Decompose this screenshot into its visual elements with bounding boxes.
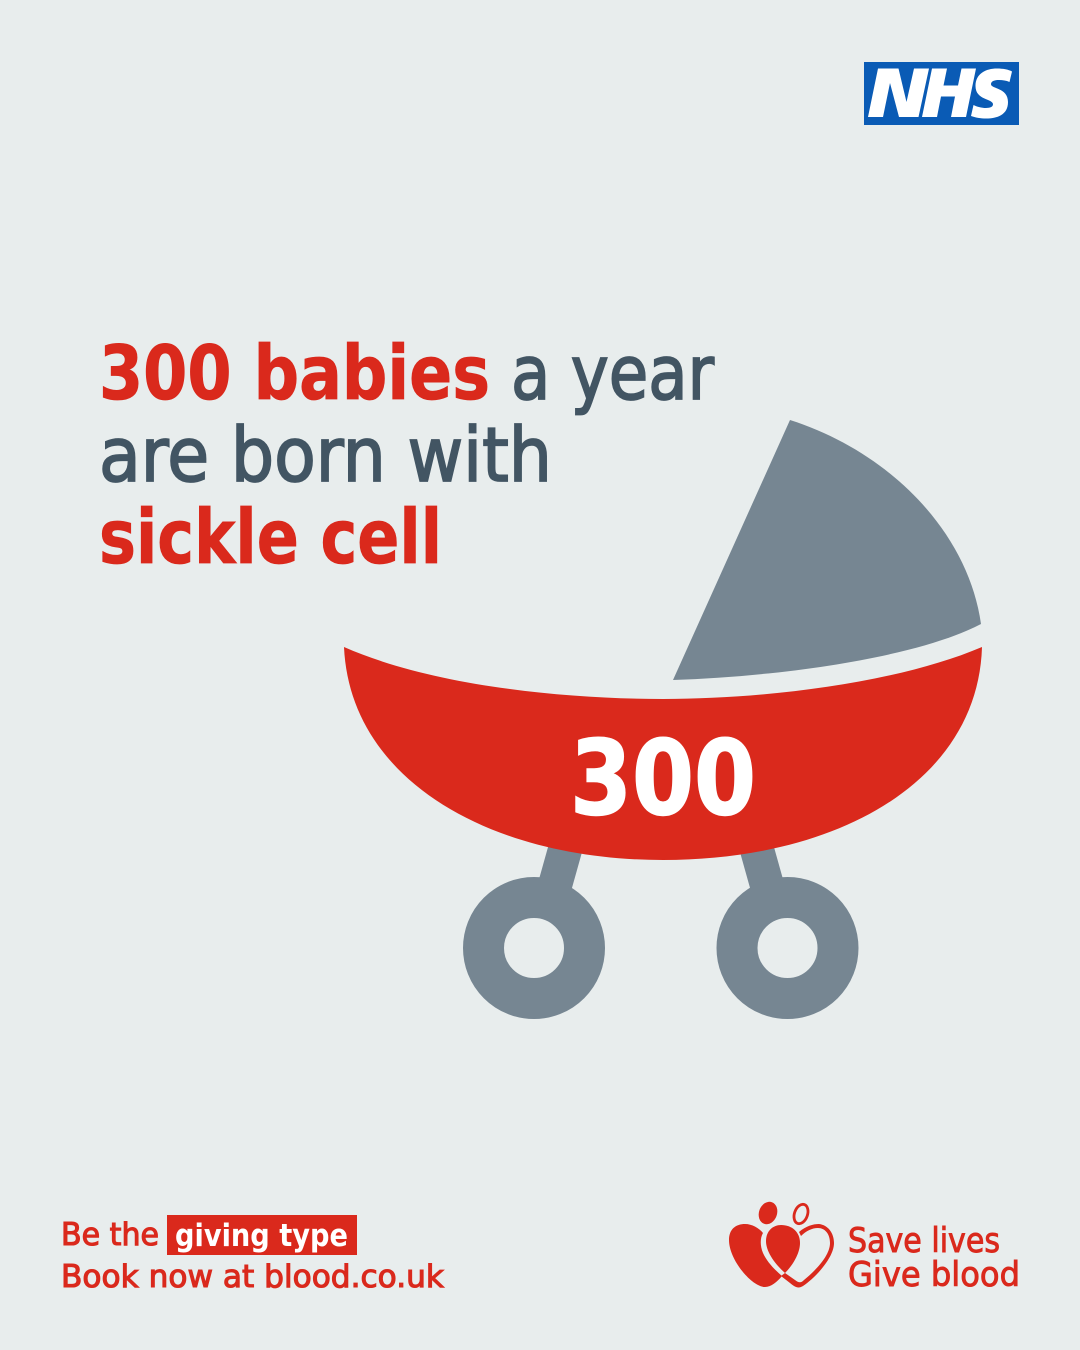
left wheel (484, 898, 584, 998)
logo hearts (729, 1199, 834, 1287)
headline line 3: sickle cell (99, 493, 442, 581)
giving type text: giving type (175, 1218, 348, 1254)
pram body (344, 647, 982, 860)
headline line 2: are born with (99, 411, 552, 499)
left wheel strut (536, 840, 584, 895)
pram hood (673, 420, 981, 680)
headline line 1: 300 babies (99, 329, 490, 417)
headline (99, 329, 714, 581)
giving type highlight (167, 1215, 357, 1255)
give blood logo (729, 1199, 1020, 1295)
NHS logo (864, 62, 1019, 125)
give blood text: Give blood (848, 1255, 1020, 1295)
right wheel (737, 898, 838, 998)
headline line 1: a year (511, 329, 714, 417)
call to action (61, 1215, 444, 1295)
right wheel strut (738, 840, 786, 895)
icon: pram (344, 420, 982, 998)
pram number: 300 (570, 719, 756, 839)
be the text: Be the (61, 1217, 159, 1253)
booking text: Book now at blood.co.uk (61, 1259, 444, 1295)
save lives text: Save lives (848, 1221, 1000, 1261)
